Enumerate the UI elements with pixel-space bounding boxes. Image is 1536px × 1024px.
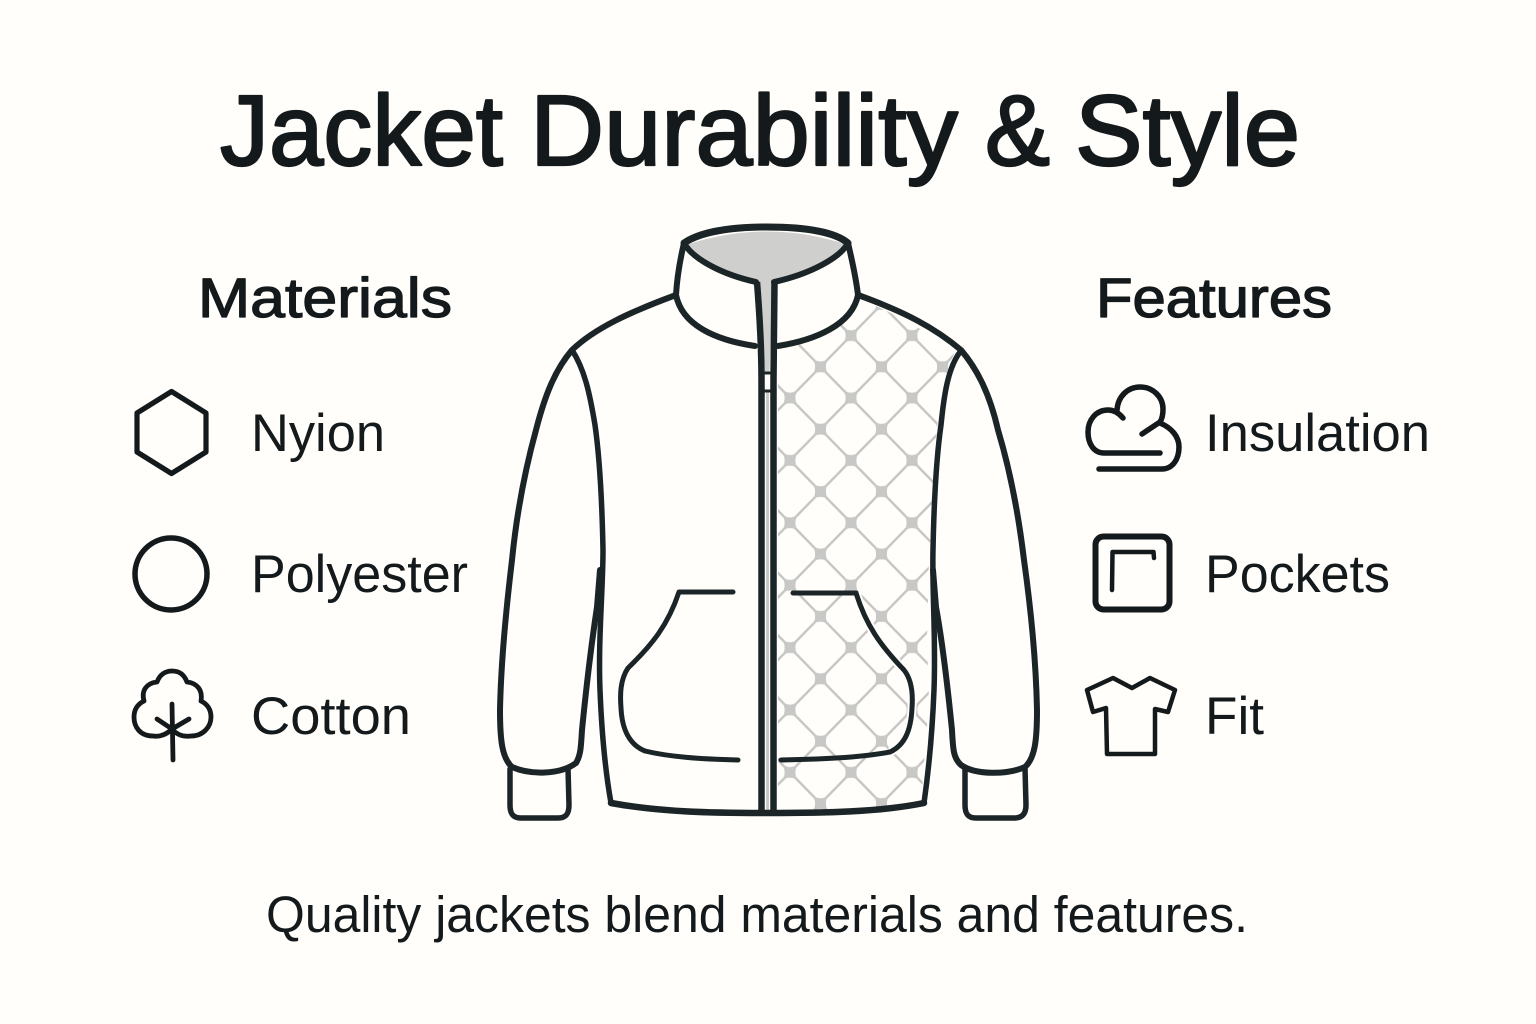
title [220, 75, 1300, 187]
label: cotton: Cotton [251, 687, 411, 746]
footer caption: Quality jackets blend materials and features. [266, 886, 1248, 943]
cuffs [510, 768, 569, 818]
hem [611, 803, 924, 813]
zipper centre tape [766, 390, 769, 810]
right pocket [781, 593, 912, 760]
panel: features [1087, 266, 1430, 754]
shoulders and outer sleeves [500, 295, 676, 773]
quilted diamond lining [770, 300, 960, 820]
icon: nylon hexagon [137, 392, 206, 474]
pocket halo [856, 593, 912, 752]
icon: pocket square [1096, 536, 1170, 610]
label: fit: Fit [1205, 687, 1264, 746]
inner collar lining [686, 232, 848, 373]
body side seams [572, 350, 611, 803]
label: insulation: Insulation [1205, 404, 1430, 463]
panel: materials [134, 266, 468, 760]
title: Durability [530, 75, 958, 187]
jacket illustration [500, 227, 1037, 820]
icon: insulation cloud [1088, 387, 1179, 469]
label: nylon: Nyion [251, 404, 385, 463]
icon: polyester circle [135, 538, 207, 610]
label: polyester: Polyester [251, 545, 468, 604]
heading: features: Features [1096, 266, 1332, 329]
zipper pull [763, 373, 772, 391]
title: Jacket [220, 75, 503, 187]
label: pockets: Pockets [1205, 545, 1390, 604]
left pocket [621, 592, 738, 760]
collar [684, 227, 848, 243]
zipper edges [757, 282, 762, 812]
heading: materials: Materials [198, 266, 452, 329]
icon: cotton plant [134, 671, 211, 760]
title: Style [1075, 75, 1300, 187]
icon: t-shirt fit [1087, 678, 1175, 754]
jacket outline [500, 227, 1037, 818]
title: & [985, 75, 1050, 187]
